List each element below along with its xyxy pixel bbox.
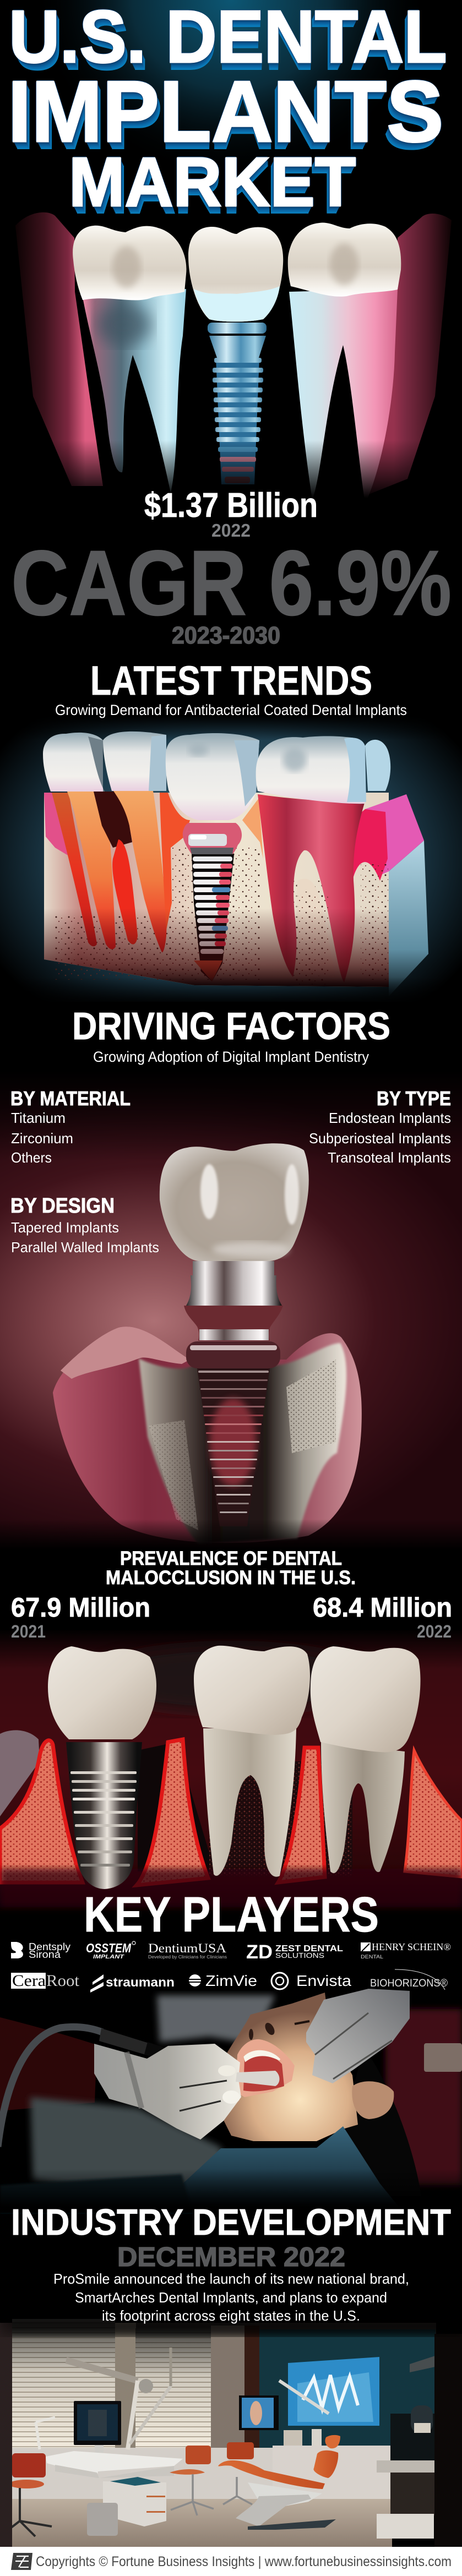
left tooth red prong bbox=[52, 793, 97, 946]
logo: Envista bbox=[271, 1972, 351, 1989]
cross section bottom fade bbox=[0, 977, 462, 1005]
patient face bbox=[223, 1993, 358, 2141]
porcelain crown bbox=[160, 1143, 309, 1261]
side cabinet bbox=[273, 2446, 391, 2499]
logo: CeraRoot: Cera bbox=[12, 1972, 46, 1990]
dentist treatment illustration bbox=[0, 1989, 462, 2213]
bottom shading of block bbox=[44, 908, 389, 987]
patient collar bbox=[183, 2126, 404, 2213]
middle tooth red prong bbox=[112, 839, 138, 945]
dark pulp shadow bbox=[94, 792, 132, 848]
ear bbox=[352, 2081, 394, 2119]
centre window blinds bbox=[135, 2328, 211, 2448]
hair bbox=[341, 2048, 421, 2196]
x-ray painting bbox=[279, 2357, 379, 2426]
industry development body text: SmartArches Dental Implants, and plans to expand bbox=[75, 2289, 387, 2306]
logo: ZimVie: ZimVie bbox=[205, 1972, 257, 1989]
dental clinic interior illustration bbox=[0, 2301, 462, 2547]
logo: BioHorizons: BIOHORIZONS® bbox=[370, 1978, 448, 1989]
crimson gum bbox=[352, 809, 388, 881]
lower wall bbox=[12, 2448, 274, 2518]
dental lamp arm bbox=[66, 2348, 171, 2449]
segment: by material bbox=[10, 1087, 131, 1166]
pale fork bone bbox=[297, 879, 336, 977]
implant collar bbox=[186, 1341, 280, 1368]
left pink gum bbox=[44, 793, 69, 856]
dentist image bottom fade bbox=[0, 2169, 462, 2213]
dentist grey gown top bbox=[157, 1995, 275, 2042]
logo: DentiumUSA: DentiumUSA bbox=[148, 1941, 226, 1955]
shelf items bbox=[284, 2430, 302, 2446]
logo: Henry Schein Dental: HENRY SCHEIN® bbox=[372, 1941, 451, 1952]
hero bottom fade bbox=[0, 440, 462, 506]
logo: CeraRoot: Root bbox=[46, 1972, 80, 1990]
prevalence heading: MALOCCLUSION IN THE U.S. bbox=[106, 1567, 356, 1589]
gum body bbox=[53, 1327, 362, 1543]
desk lamp bbox=[36, 2417, 55, 2449]
left molar bbox=[73, 226, 187, 493]
hero illustration: natural teeth and central implant bbox=[15, 212, 452, 504]
logo: Dentsply Sirona: Dentsply bbox=[29, 1941, 70, 1952]
back tissue bbox=[0, 1730, 40, 1816]
blue glow backdrop bbox=[0, 716, 462, 1002]
red upholstery right bbox=[385, 2009, 462, 2185]
floor bbox=[12, 2499, 392, 2547]
driving factors heading: DRIVING FACTORS bbox=[72, 1005, 390, 1047]
stat: 2021 bbox=[11, 1593, 150, 1641]
segment: by material: Zirconium bbox=[11, 1130, 73, 1147]
drill handle bbox=[99, 2028, 237, 2078]
title background glow bbox=[0, 0, 462, 182]
logo: CeraRoot bbox=[11, 1972, 80, 1990]
implant crown bbox=[188, 227, 283, 321]
title line: IMPLANTS: IMPLANTS bbox=[8, 63, 443, 160]
driving factors illustration: implant in jaw bbox=[0, 1071, 462, 1549]
open mouth bbox=[236, 2039, 295, 2097]
logo: Henry Schein Dental: DENTAL bbox=[361, 1954, 383, 1960]
latest trends illustration: implant cross section bbox=[0, 716, 462, 1002]
industry development body text: ProSmile announced the launch of its new national brand, bbox=[53, 2271, 409, 2287]
logo: Straumann bbox=[90, 1974, 175, 1993]
tooth crowns bbox=[43, 732, 390, 820]
title bbox=[8, 0, 447, 221]
blue side of block bbox=[389, 841, 428, 996]
logo: Zest Dental Solutions: ZEST DENTAL bbox=[275, 1944, 343, 1953]
industry development body text: its footprint across eight states in the U.S. bbox=[102, 2307, 360, 2324]
second red gum and bone bbox=[137, 1739, 208, 1885]
drill tube bbox=[0, 2027, 102, 2147]
implant collar bbox=[183, 823, 242, 854]
logo: Dentsply Sirona bbox=[11, 1941, 70, 1960]
middle tooth orange prong bbox=[113, 791, 166, 952]
left gum bbox=[15, 212, 103, 486]
exposed bone bbox=[139, 1343, 346, 1544]
market value: $1.37 Billion bbox=[144, 487, 318, 525]
stat: 2022 bbox=[313, 1593, 452, 1641]
stat: 2022: 68.4 Million bbox=[313, 1593, 452, 1623]
stat: 2021: 67.9 Million bbox=[11, 1593, 150, 1623]
latest trends heading: LATEST TRENDS bbox=[90, 658, 372, 703]
headrest plaque bbox=[424, 2043, 462, 2072]
logo: BioHorizons bbox=[370, 1969, 448, 1990]
logo: Zest Dental Solutions bbox=[246, 1941, 343, 1963]
industry development body text bbox=[53, 2271, 409, 2324]
segment: by material: Titanium bbox=[11, 1110, 66, 1126]
bone pores bbox=[286, 1360, 336, 1453]
image left frame bbox=[0, 2323, 12, 2547]
bin bbox=[87, 2503, 118, 2536]
right molar root bbox=[258, 794, 365, 983]
segment: by type: Endostean Implants bbox=[329, 1110, 451, 1126]
threaded screw bbox=[197, 1368, 270, 1526]
malocclusion illustration: implant beside natural teeth bbox=[0, 1629, 462, 1915]
title line: MARKET: MARKET bbox=[69, 143, 356, 221]
natural tooth two bbox=[194, 1646, 310, 1877]
segment: by design bbox=[10, 1194, 159, 1256]
implant crown bbox=[48, 1646, 156, 1739]
bone block bbox=[44, 793, 389, 987]
segment: by design: BY DESIGN bbox=[10, 1194, 115, 1218]
driving factors subtitle: Growing Adoption of Digital Implant Dentistry bbox=[93, 1049, 369, 1065]
dark red band backdrop bbox=[0, 1629, 462, 1915]
segment: by design: Tapered Implants bbox=[11, 1219, 119, 1236]
segment: by type: Subperiosteal Implants bbox=[309, 1130, 451, 1147]
drawer unit bbox=[103, 2477, 166, 2526]
industry development date: DECEMBER 2022 bbox=[117, 2242, 345, 2272]
logo: DentiumUSA bbox=[148, 1941, 227, 1960]
key players heading: KEY PLAYERS bbox=[84, 1887, 379, 1942]
left stool bbox=[6, 2453, 52, 2536]
logo: Zest Dental Solutions: ZD bbox=[246, 1941, 273, 1963]
logo: Osstem Implant: OSSTEM bbox=[86, 1941, 132, 1955]
segment: by type bbox=[309, 1087, 451, 1166]
logo: Dentsply Sirona: Sirona bbox=[29, 1949, 61, 1960]
CAGR period: 2023-2030 bbox=[172, 622, 280, 649]
teal wall bbox=[259, 2329, 436, 2448]
logo: Zest Dental Solutions: SOLUTIONS bbox=[275, 1951, 324, 1960]
centre stool bbox=[170, 2446, 214, 2515]
gum upper highlight bbox=[61, 1327, 190, 1379]
right glove bbox=[306, 1989, 410, 2083]
left red gum and bone bbox=[0, 1740, 83, 1882]
logo: Osstem Implant: IMPLANT bbox=[93, 1954, 124, 1960]
left glove bbox=[94, 2044, 241, 2140]
orange glow right of crown bbox=[242, 798, 263, 859]
second stool bbox=[223, 2442, 254, 2504]
side wall bbox=[211, 2326, 244, 2449]
natural tooth three bbox=[311, 1646, 421, 1873]
right instrument cart and shelves bbox=[377, 2334, 462, 2547]
segment: by design: Parallel Walled Implants bbox=[11, 1239, 159, 1256]
footer bar bbox=[0, 2547, 462, 2576]
logo: Envista: Envista bbox=[296, 1972, 351, 1989]
right red gum and bone bbox=[405, 1750, 462, 1877]
logo: ZimVie bbox=[189, 1972, 257, 1989]
stat: 2021: 2021 bbox=[11, 1622, 46, 1641]
right gum bbox=[366, 214, 452, 495]
jaw bottom fade bbox=[0, 1519, 462, 1552]
lower left gown bbox=[30, 2097, 231, 2196]
chrome abutment bbox=[184, 1261, 283, 1341]
implant screw bbox=[192, 854, 234, 981]
logo: Henry Schein Dental bbox=[361, 1941, 451, 1960]
stat: 2022: 2022 bbox=[417, 1622, 452, 1641]
logo row two bbox=[11, 1969, 448, 1993]
logo: Straumann: straumann bbox=[106, 1975, 175, 1989]
segment: by type: Transoteal Implants bbox=[328, 1149, 451, 1166]
bone speckles bbox=[172, 848, 260, 980]
wall base bbox=[12, 2323, 436, 2504]
lower dark gown bbox=[0, 2174, 193, 2213]
left tooth orange prong bbox=[67, 792, 116, 949]
drill head bbox=[236, 2071, 280, 2086]
white desk bbox=[46, 2451, 183, 2477]
pink gum bbox=[365, 794, 424, 875]
implant abutment and screw bbox=[208, 323, 267, 484]
third red gum and bone bbox=[278, 1748, 325, 1882]
left window blinds bbox=[12, 2319, 115, 2451]
right molar bbox=[288, 223, 401, 504]
market value year: 2022 bbox=[211, 520, 251, 541]
orange glow around crown bbox=[160, 793, 190, 930]
logo: DentiumUSA: Developed by Clinicians for Clinicians bbox=[148, 1955, 227, 1960]
segment: by type: BY TYPE bbox=[377, 1087, 451, 1110]
lower tissue shade bbox=[0, 1869, 462, 1907]
segment: by material: Others bbox=[11, 1149, 52, 1166]
desk monitor bbox=[74, 2401, 121, 2453]
nostrils and closed eye bbox=[249, 2021, 309, 2040]
wall monitor bbox=[239, 2395, 279, 2430]
implant screw body bbox=[66, 1742, 142, 1889]
footer logo bbox=[11, 2553, 32, 2570]
logo row one bbox=[11, 1941, 451, 1963]
latest trends subtitle: Growing Demand for Antibacterial Coated Dental Implants bbox=[55, 702, 407, 718]
prevalence heading bbox=[106, 1548, 356, 1589]
pink radial backdrop bbox=[0, 1071, 462, 1549]
dental chair bbox=[218, 2435, 340, 2530]
pillar bbox=[115, 2323, 136, 2452]
segment: by material: BY MATERIAL bbox=[10, 1087, 131, 1110]
dentist sleeve bbox=[0, 2017, 97, 2111]
prevalence heading: PREVALENCE OF DENTAL bbox=[120, 1548, 342, 1569]
